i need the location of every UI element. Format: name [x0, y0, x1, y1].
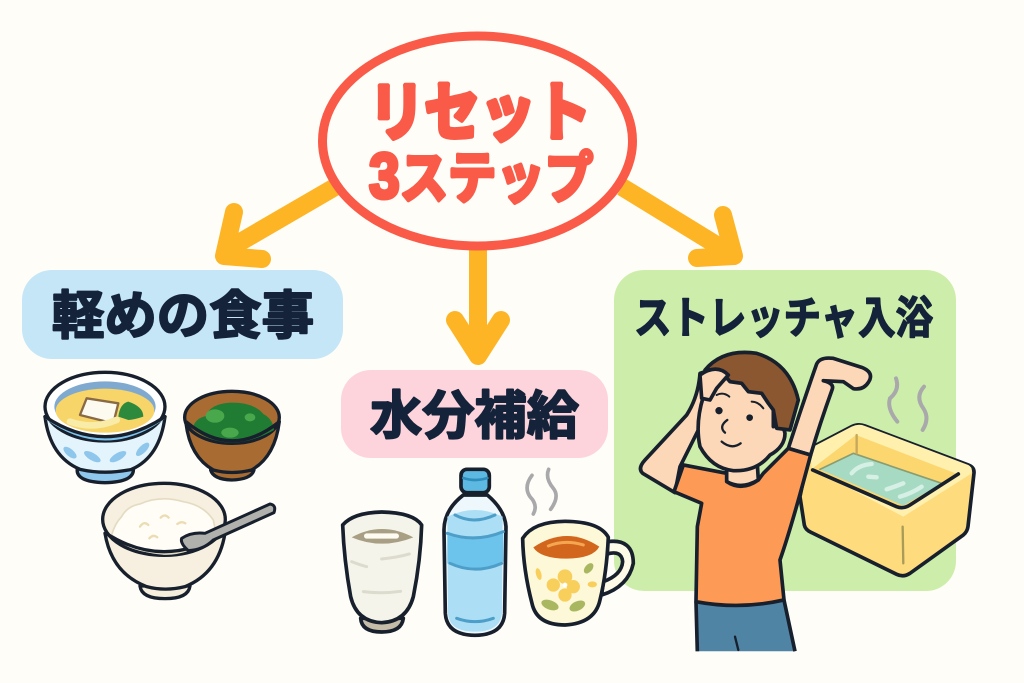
- icon: steam over bath: [889, 378, 926, 430]
- icon: seaweed bowl: [185, 391, 279, 480]
- icon: rice porridge bowl with spoon: [103, 483, 275, 599]
- heading: hydration: 水分補給: [370, 388, 579, 446]
- hand on head: [700, 369, 728, 400]
- panel: stretch and bath: [614, 270, 956, 591]
- icon: floral tea mug: [523, 521, 633, 625]
- face: [716, 394, 763, 446]
- title ellipse: [322, 36, 632, 246]
- icon: yunomi teacup: [343, 512, 422, 632]
- head: [698, 377, 785, 471]
- arrow: to stretch and bath: [622, 187, 734, 258]
- icon: soup bowl: [45, 372, 165, 483]
- illustration: man stretching: [640, 352, 870, 651]
- title text line 2: 3ステップ: [369, 140, 593, 212]
- panel: hydration heading background: [341, 370, 608, 458]
- trousers: [696, 600, 795, 651]
- hair: [705, 352, 798, 430]
- icon: water bottle: [444, 469, 506, 635]
- heading: stretch and bath: ストレッチャ入浴: [634, 294, 933, 343]
- raised arm: [788, 358, 870, 455]
- neck: [727, 453, 758, 485]
- arrow: to hydration: [455, 250, 501, 356]
- icon: steam over tea: [527, 469, 556, 514]
- shirt: [674, 448, 811, 605]
- panel: light meal heading background: [22, 270, 343, 359]
- arrow: to light meal: [224, 187, 335, 259]
- title text line 1: リセット: [369, 77, 591, 149]
- icon: bathtub: [800, 425, 974, 576]
- bent arm: [640, 367, 730, 493]
- heading: light meal: 軽めの食事: [52, 288, 314, 346]
- trouser crease: [735, 637, 738, 650]
